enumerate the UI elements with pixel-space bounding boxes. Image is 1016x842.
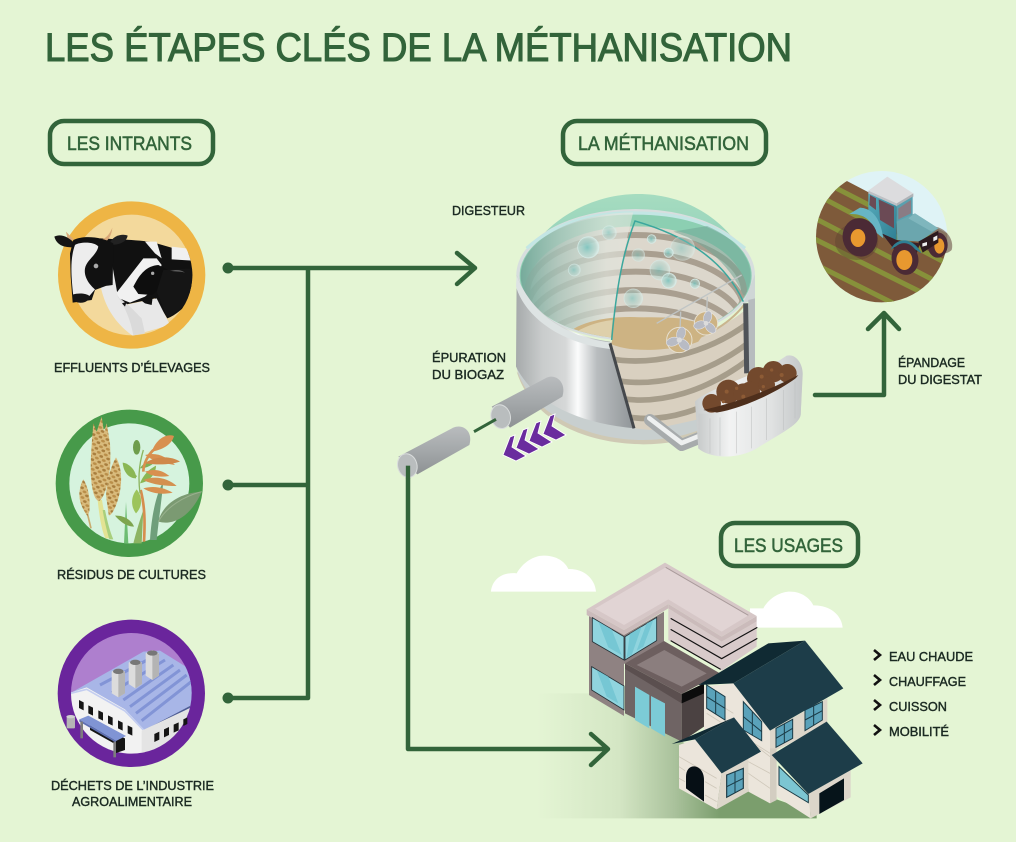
buildings scene bbox=[491, 556, 863, 818]
arrow: epuration to usages bbox=[408, 468, 608, 765]
label: dechets de l'industrie agroalimentaire: DÉCHETS DE L’INDUSTRIE bbox=[51, 778, 214, 793]
label: epuration du biogaz: ÉPURATION bbox=[432, 350, 506, 365]
cloud right bbox=[750, 592, 843, 628]
office building bbox=[587, 563, 757, 742]
heading: la méthanisation: LA MÉTHANISATION bbox=[578, 132, 749, 155]
arrow: digestat to epandage bbox=[815, 313, 899, 395]
dome bbox=[522, 194, 750, 265]
heading: les intrants: LES INTRANTS bbox=[67, 133, 192, 155]
large house bbox=[698, 641, 843, 803]
label: dechets de l'industrie agroalimentaire bbox=[51, 778, 214, 809]
icon: food factory bbox=[58, 620, 205, 767]
label: epuration du biogaz bbox=[432, 350, 506, 382]
garage bbox=[772, 722, 863, 818]
heading: les usages: LES USAGES bbox=[734, 535, 843, 557]
label: digesteur: DIGESTEUR bbox=[452, 204, 525, 218]
label: epandage du digestat bbox=[898, 355, 982, 387]
heading: la méthanisation bbox=[563, 121, 766, 164]
ground shadow bbox=[517, 372, 710, 444]
label: dechets de l'industrie agroalimentaire: AGROALIMENTAIRE bbox=[72, 795, 192, 809]
label: epandage du digestat: DU DIGESTAT bbox=[898, 373, 982, 387]
usages list bbox=[874, 650, 973, 739]
usages list: MOBILITÉ bbox=[889, 724, 949, 739]
ground gradient under buildings bbox=[537, 693, 817, 818]
cloud left bbox=[491, 556, 596, 592]
heading: les usages bbox=[721, 523, 858, 566]
compost tank bbox=[695, 355, 803, 456]
icon: crop plants bbox=[56, 410, 203, 557]
cutaway wall section bbox=[607, 305, 750, 430]
green connector bbox=[474, 419, 496, 432]
icon: cows bbox=[54, 201, 205, 349]
label: epuration du biogaz: DU BIOGAZ bbox=[432, 368, 504, 382]
elbow pipe bbox=[649, 418, 708, 445]
epuration pipe: lower cylinder bbox=[395, 427, 470, 480]
usages list: CUISSON bbox=[889, 700, 947, 714]
liquid surface bbox=[612, 317, 710, 350]
epuration pipe: upper cylinder bbox=[488, 377, 563, 431]
title: LES ÉTAPES CLÉS DE LA MÉTHANISATION bbox=[45, 25, 792, 70]
arrow: intrants to digesteur bbox=[222, 253, 475, 704]
label: residus de cultures: RÉSIDUS DE CULTURES bbox=[57, 567, 206, 582]
small house bbox=[672, 717, 761, 809]
tank rim and interior bbox=[516, 209, 755, 341]
heading: les intrants bbox=[50, 121, 213, 164]
glass edge bbox=[612, 221, 743, 340]
biogas bubbles bbox=[568, 226, 700, 308]
digester tank bbox=[395, 194, 803, 480]
label: effluents d'elevages: EFFLUENTS D’ÉLEVAGES bbox=[54, 360, 210, 375]
purple chevrons bbox=[503, 414, 566, 461]
usages list: CHAUFFAGE bbox=[889, 675, 966, 689]
mixer bbox=[657, 275, 742, 353]
label: epandage du digestat: ÉPANDAGE bbox=[898, 355, 965, 370]
icon: tractor on field bbox=[810, 171, 952, 307]
front wall bbox=[516, 275, 635, 428]
usages list: EAU CHAUDE bbox=[889, 650, 973, 664]
